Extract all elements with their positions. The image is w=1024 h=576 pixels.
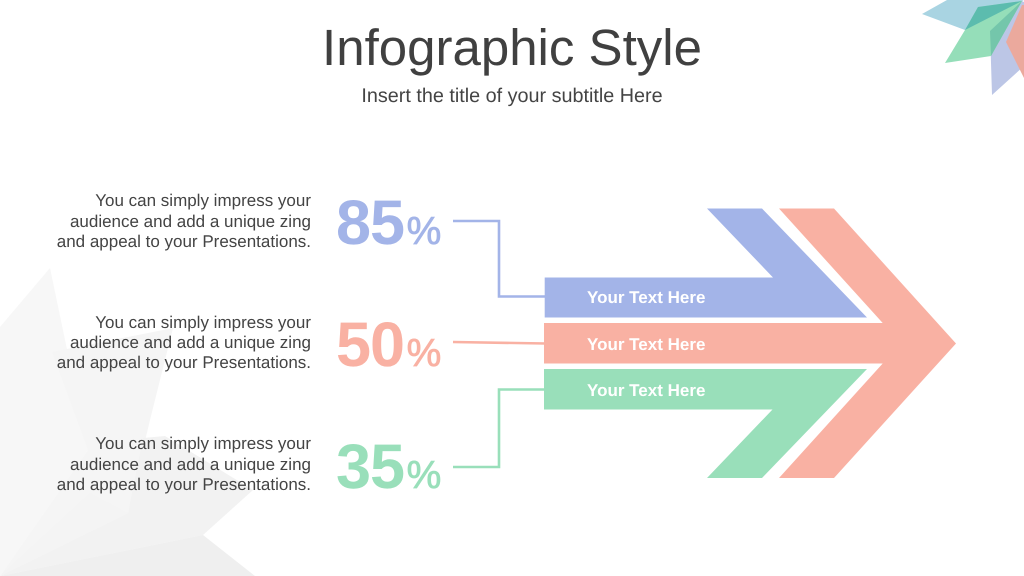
title: Infographic Style [322, 19, 702, 76]
decoration: grey polygons bottom-left [0, 328, 254, 576]
text block: first description [57, 191, 311, 251]
arrow: blue upper segment [545, 208, 867, 318]
label: green bar: Your Text Here [587, 381, 705, 400]
decoration: coloured petals top-right [922, 0, 1024, 95]
text block: second description: and appeal to your Presentations. [57, 353, 311, 372]
text block: first description: and appeal to your Presentations. [57, 232, 311, 251]
text block: third description: audience and add a unique zing [70, 455, 311, 474]
stat: 85%: 85% [336, 188, 441, 258]
text block: third description: and appeal to your Presentations. [57, 475, 311, 494]
connector: blue [453, 221, 546, 296]
connector: salmon [453, 342, 546, 344]
text block: second description: audience and add a unique zing [70, 333, 311, 352]
text block: first description: audience and add a unique zing [70, 212, 311, 231]
text block: first description: You can simply impress your [95, 191, 311, 210]
connector: green [453, 390, 546, 467]
text block: third description [57, 434, 311, 494]
label: salmon bar: Your Text Here [587, 334, 705, 354]
text block: second description [57, 312, 311, 372]
arrow: green lower segment [544, 369, 867, 478]
stat: 50%: 50% [336, 310, 441, 380]
arrow: salmon middle segment [544, 208, 956, 478]
text block: second description: You can simply impress your [95, 312, 311, 332]
text block: third description: You can simply impress your [95, 434, 311, 453]
subtitle: Insert the title of your subtitle Here [361, 85, 663, 107]
label: blue bar: Your Text Here [587, 288, 705, 307]
stat: 35%: 35% [336, 432, 441, 502]
